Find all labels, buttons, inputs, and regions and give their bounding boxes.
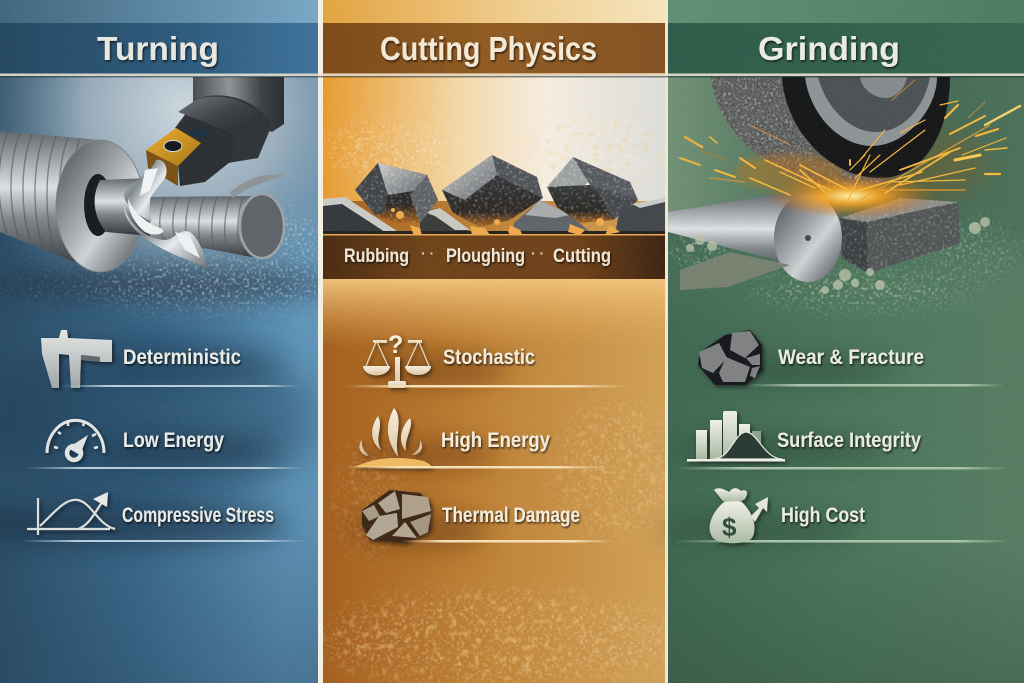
wheel hub xyxy=(782,77,950,178)
icon: balance scales with question mark xyxy=(363,331,431,388)
illustration: abrasive grains on surface xyxy=(323,150,665,279)
heading band: Grinding xyxy=(668,23,1024,73)
dust: golden particles xyxy=(323,100,665,683)
chip xyxy=(124,160,207,268)
cylinder workpiece xyxy=(668,194,812,282)
hot debris xyxy=(391,208,620,245)
illustration: grinding wheel, workpiece and sparks xyxy=(668,77,1020,294)
row: Surface Integrity: Surface Integrity xyxy=(777,429,921,452)
row: Low Energy: Low Energy xyxy=(123,429,224,452)
dust: metal particles xyxy=(7,204,318,319)
row: Wear and Fracture: Wear & Fracture xyxy=(778,346,924,369)
row: Thermal Damage xyxy=(362,490,615,543)
heading band: Turning xyxy=(0,23,318,76)
icon: balance scales with question mark: ? xyxy=(388,331,403,359)
row: High Cost: High Cost xyxy=(781,504,865,527)
insert xyxy=(146,128,201,166)
neck xyxy=(84,174,112,236)
abrasive grains xyxy=(355,155,638,227)
heading band: Turning: Turning xyxy=(97,30,219,67)
label band: Rubbing xyxy=(344,246,409,267)
workpiece xyxy=(130,196,262,259)
dust: grinding debris xyxy=(668,200,1024,320)
row: Deterministic: Deterministic xyxy=(123,346,241,369)
label band: Ploughing xyxy=(446,246,525,267)
icon: fractured wheel xyxy=(698,330,762,385)
sparks xyxy=(680,80,1020,218)
icon: cracked surface xyxy=(362,490,431,543)
tool holder xyxy=(193,77,284,132)
panel: cutting physics xyxy=(323,0,665,683)
icon: histogram with bell curve xyxy=(687,411,785,462)
panel: grinding xyxy=(660,0,1024,683)
panel: turning xyxy=(0,0,335,683)
row: Compressive Stress: Compressive Stress xyxy=(122,504,274,527)
row: High Energy xyxy=(345,408,610,468)
row: Wear and Fracture xyxy=(698,330,1005,386)
label band: · · xyxy=(531,245,544,261)
icon: gauge xyxy=(47,420,104,460)
illustration: lathe turning tool and workpiece xyxy=(0,77,285,272)
heading band: Grinding: Grinding xyxy=(758,30,900,67)
ground surface xyxy=(323,198,395,234)
row: High Cost xyxy=(675,488,1010,543)
block workpiece xyxy=(840,198,958,222)
icon: money bag with arrow: $ xyxy=(722,512,737,542)
row: Compressive Stress xyxy=(20,492,305,542)
heading band: Cutting Physics xyxy=(323,23,665,73)
stone slab xyxy=(680,252,790,290)
grinding wheel stone xyxy=(711,77,886,192)
cylinder face xyxy=(56,140,144,272)
icon: heat flames xyxy=(354,408,432,468)
spark haze xyxy=(810,125,990,205)
row: Thermal Damage: Thermal Damage xyxy=(442,504,580,527)
row: Stochastic: Stochastic xyxy=(443,346,535,369)
icon: money bag with arrow xyxy=(710,488,768,543)
row: Deterministic xyxy=(41,330,300,388)
row: Low Energy xyxy=(25,420,305,469)
row: Surface Integrity xyxy=(675,411,1010,470)
debris pile xyxy=(686,217,990,294)
icon: stress curve xyxy=(27,492,115,535)
large cylinder body xyxy=(0,131,100,272)
label band: · · xyxy=(421,245,434,261)
icon: caliper xyxy=(41,330,112,388)
row: Stochastic xyxy=(345,331,630,388)
row: High Energy: High Energy xyxy=(441,429,550,452)
label band: Cutting xyxy=(553,246,611,267)
heading band: Cutting Physics: Cutting Physics xyxy=(380,30,597,67)
label band xyxy=(323,234,665,279)
